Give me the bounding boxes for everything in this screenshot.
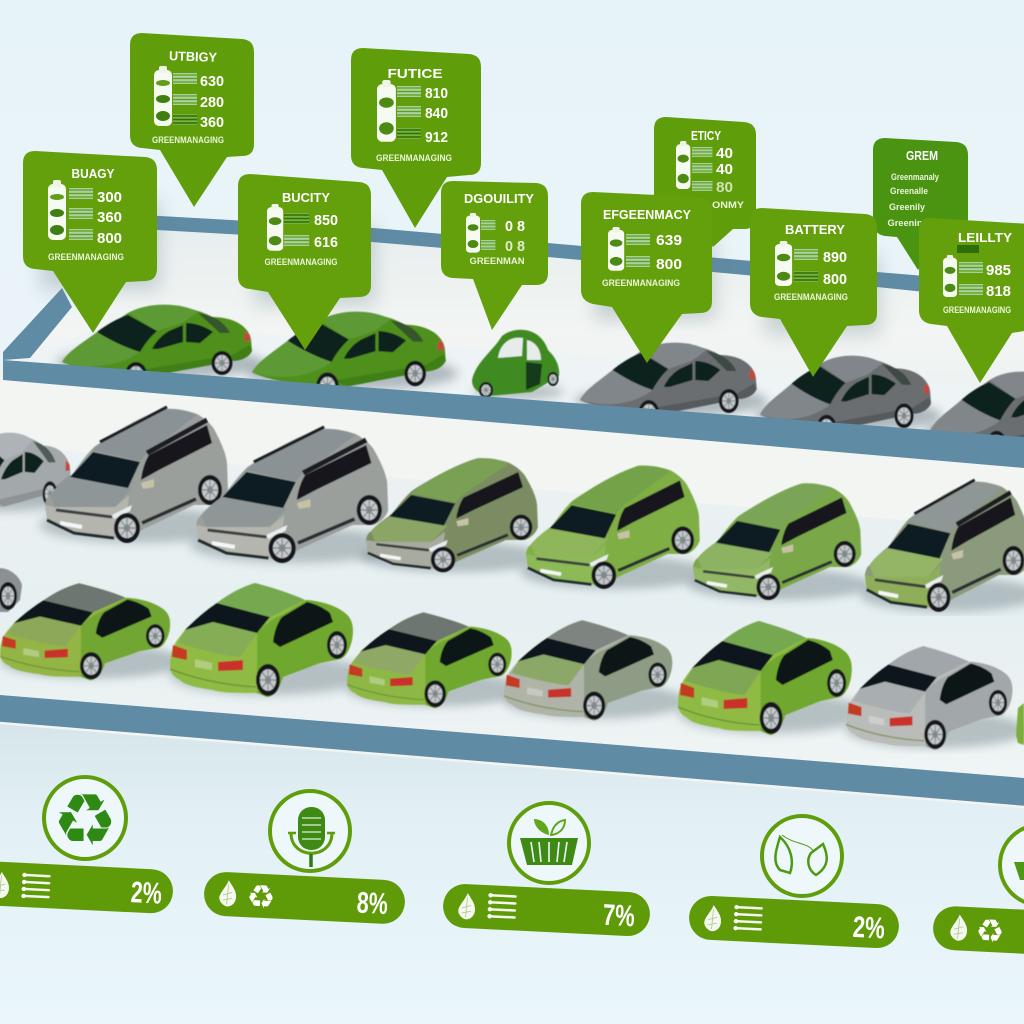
- callout: bucity: BUCITY: [282, 190, 330, 205]
- car: small bubble car: [472, 330, 564, 400]
- callout: green list: Greenily: [889, 202, 926, 213]
- callout: durability: 0 8: [505, 238, 525, 255]
- callout: durability: DGOUILITY: [464, 191, 534, 206]
- callout: efficiency: [581, 192, 712, 363]
- pill 2: ♻: [246, 877, 276, 917]
- callout: battery: GREENMANAGING: [774, 292, 848, 303]
- pill 4: [688, 895, 900, 949]
- callout: efficiency: GREENMANAGING: [602, 278, 680, 289]
- callout: future: 912: [425, 129, 448, 146]
- car: silver and green: [504, 620, 688, 721]
- callout: green list: [873, 138, 968, 270]
- car: gray sedan 2: [755, 356, 942, 441]
- car: silver SUV 2: [190, 427, 400, 563]
- callout: durability: 0 8: [505, 218, 525, 235]
- pill 1: 2%: [130, 876, 163, 911]
- icon: partial right circle: [1000, 825, 1024, 905]
- callout: battery: [750, 208, 877, 377]
- callout: green list: Greenmanaly: [891, 172, 940, 183]
- callout: battery: 890: [823, 249, 847, 266]
- callout: bucity: 850: [314, 212, 338, 229]
- callout: efficiency: 639: [656, 232, 682, 249]
- callout: future: FUTICE: [388, 66, 443, 81]
- callout: energy left: GREENMANAGING: [48, 252, 124, 263]
- icon: recycling: ♻: [53, 778, 117, 862]
- callout: future: GREENMANAGING: [376, 153, 452, 164]
- callout: upper right rear: ONMY: [712, 200, 745, 211]
- callout: efficiency: 800: [656, 256, 682, 273]
- callout: battery: 800: [823, 271, 847, 288]
- pill 5: [932, 905, 1024, 959]
- car: green sedan 1: [56, 305, 264, 388]
- icon: leaves: [762, 816, 842, 896]
- car: green hatch 2: [687, 482, 871, 600]
- pill 1: [0, 860, 174, 914]
- car: green sedan 2: [246, 312, 458, 400]
- callout shadows: [40, 200, 880, 335]
- callout: upper right rear: 40: [716, 161, 733, 178]
- callout: top energy: GREENMANAGING: [152, 135, 224, 146]
- callout: energy left: 360: [97, 209, 122, 226]
- car: green partial: [1016, 703, 1024, 745]
- icon: basket with sprout: [509, 803, 589, 883]
- car: gray sedan 1: [574, 343, 768, 426]
- car: green and gray hatch: [360, 457, 548, 572]
- car: green with gray roof: [347, 612, 527, 708]
- car: green hatch 1: [520, 464, 710, 589]
- car: green and silver SUV: [860, 480, 1024, 612]
- callout: top energy: [130, 33, 254, 207]
- callout: upper right rear: 40: [716, 145, 733, 162]
- callout: future: [351, 48, 481, 228]
- car: green with dark roof: [0, 583, 186, 680]
- callout: top energy: 280: [200, 94, 224, 111]
- icon: microphone: [270, 791, 350, 871]
- callout: bucity: GREENMANAGING: [264, 257, 338, 268]
- pill 3: [442, 883, 651, 937]
- callout: top energy: 630: [200, 73, 224, 90]
- callout: future: 840: [425, 105, 448, 122]
- callout: bucity: 616: [314, 234, 338, 251]
- lower shelf front band: [0, 695, 1024, 807]
- callout: durability: GREENMAN: [470, 256, 525, 267]
- car: gray sedan 3: [925, 372, 1024, 457]
- car: green rear 2: [678, 621, 868, 735]
- callout: future: 810: [425, 85, 448, 102]
- upper shelf: [0, 214, 1024, 450]
- callout: durability: [441, 181, 548, 330]
- car: silver sedan partial: [0, 433, 79, 520]
- callout: utility right: 985: [986, 262, 1011, 279]
- callout: top energy: UTBIGY: [169, 48, 218, 65]
- callout: energy left: [23, 151, 157, 333]
- callout: efficiency: EFGEENMACY: [603, 207, 691, 222]
- lower area backdrop: [0, 720, 1024, 1024]
- lower shelf floor: [0, 445, 1024, 780]
- pill 3: 7%: [602, 899, 636, 933]
- upper shelf front band: [3, 360, 1024, 468]
- wall below upper shelf: [0, 378, 1024, 540]
- callout: energy left: 300: [97, 189, 122, 206]
- callout: upper right rear: ETICY: [691, 128, 721, 143]
- callout: top energy: 360: [200, 114, 224, 131]
- callout: upper right rear: [654, 117, 756, 247]
- callout: energy left: BUAGY: [72, 166, 115, 181]
- callout: utility right: LEILLTY: [958, 230, 1012, 245]
- car: green rear: [170, 583, 370, 697]
- callout: green list: Greenalle: [890, 186, 928, 197]
- pill 2: 8%: [356, 887, 389, 921]
- callout: battery: BATTERY: [785, 222, 845, 237]
- pill 5: ♻: [975, 911, 1005, 951]
- car: silver SUV 1: [39, 407, 239, 543]
- pill 2: [203, 871, 406, 925]
- car: silver partial: [0, 568, 22, 612]
- callout: bucity: [238, 174, 371, 350]
- callout: green list: Greenin: [888, 218, 923, 229]
- callout: energy left: 800: [97, 230, 122, 247]
- callout: utility right: [919, 218, 1024, 383]
- callout: utility right: 818: [986, 283, 1011, 300]
- callout: upper right rear: 80: [716, 179, 733, 196]
- callout: green list: GREM: [906, 148, 938, 163]
- bottom row of cars: [0, 568, 1024, 750]
- middle row of cars: [0, 407, 1024, 612]
- pill 4: 2%: [852, 911, 886, 945]
- top row of cars: [56, 305, 1024, 457]
- car: silver rear: [846, 646, 1024, 750]
